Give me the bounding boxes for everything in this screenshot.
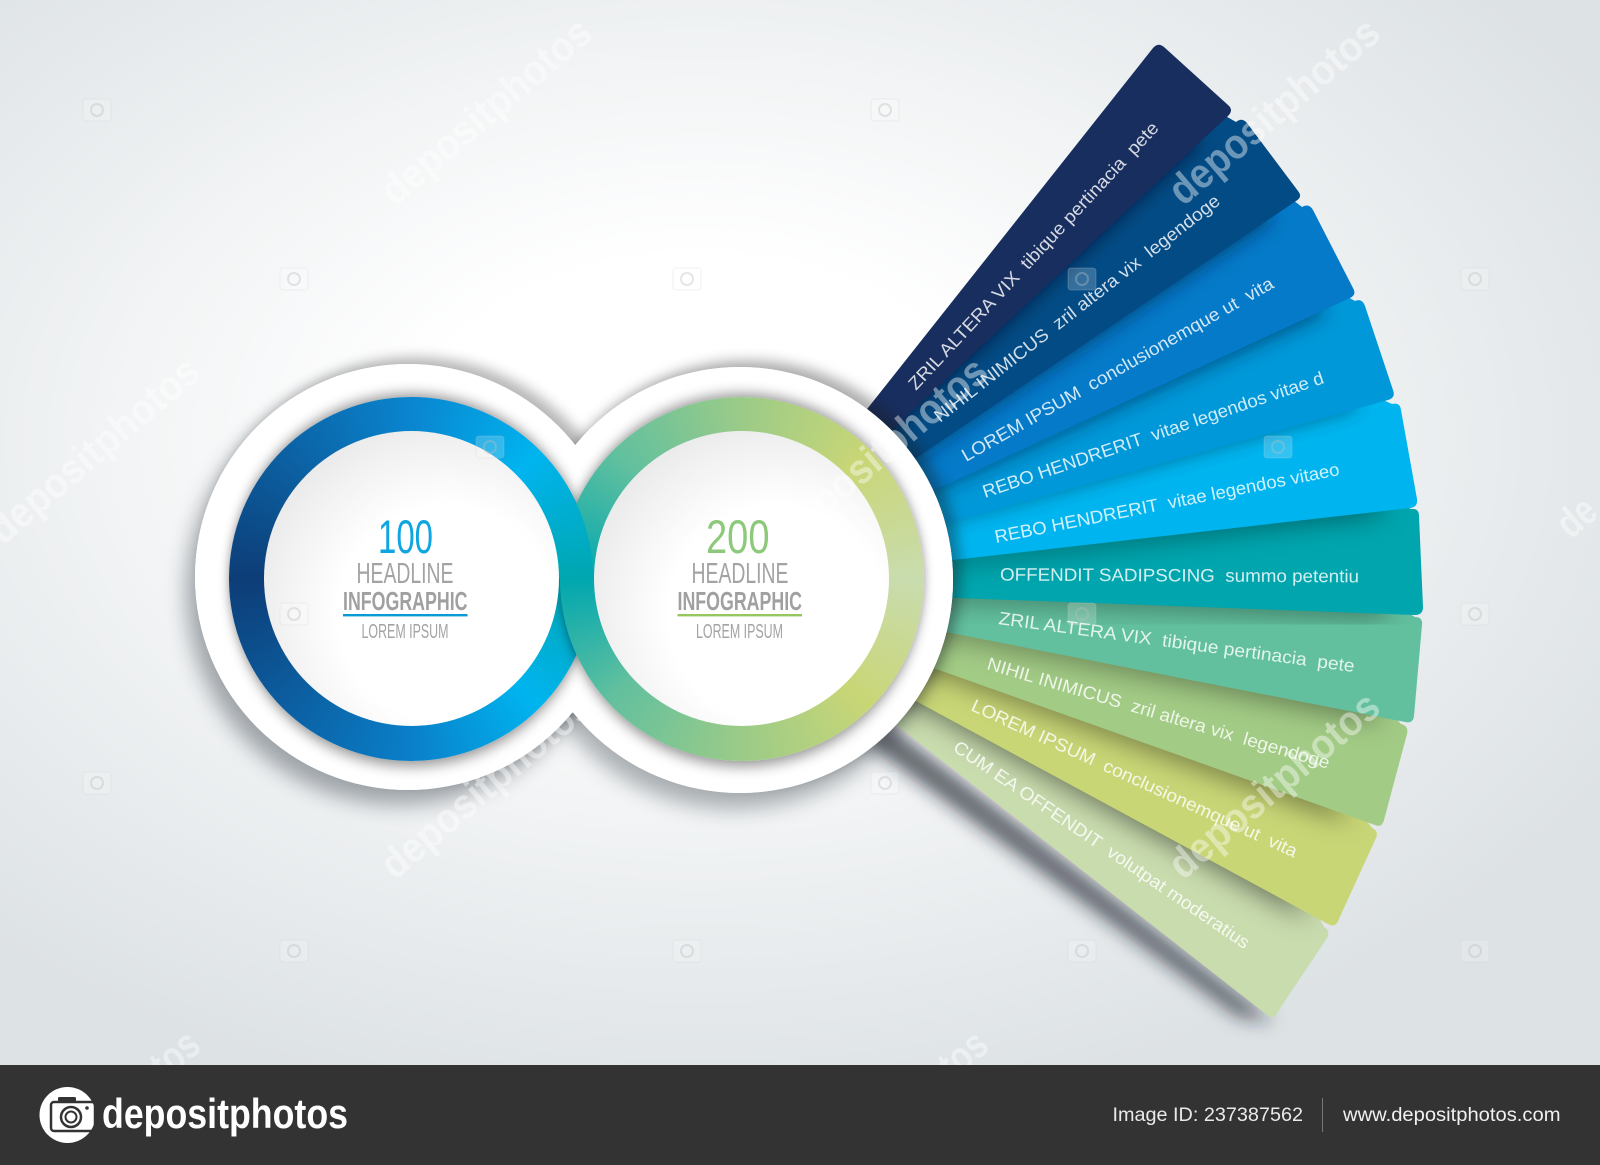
left circle text: 100 (378, 510, 433, 563)
band 4 (933, 298, 1394, 520)
depositphotos watermarks: tos (140, 1020, 209, 1088)
shadow under lowest band (868, 722, 1273, 1022)
band 2 (892, 116, 1300, 458)
band 2: NIHIL INIMICUS zril altera vix legendoge (930, 191, 1224, 426)
right circle text: LOREM IPSUM (696, 621, 783, 643)
band 3: LOREM IPSUM conclusionemque ut vita (958, 273, 1278, 465)
band 5: REBO HENDRERIT vitae legendos vitaeo (993, 459, 1341, 547)
left blue ring (229, 396, 593, 760)
right inner disc (594, 431, 889, 726)
shadow of left white disc (195, 364, 621, 790)
image id: Image ID: 237387562 (1112, 1104, 1303, 1126)
band 7: ZRIL ALTERA VIX tibique pertinacia pete (997, 608, 1356, 676)
website: www.depositphotos.com (1342, 1104, 1560, 1126)
depositphotos watermarks: depositphotos (371, 682, 601, 888)
left inner disc (264, 431, 559, 726)
right circle text (678, 510, 802, 643)
left circle text: INFOGRAPHIC (343, 588, 468, 616)
fan of ten coloured bands (864, 44, 1423, 1032)
band 8 (934, 632, 1408, 826)
band 6 (952, 508, 1423, 615)
infinity pair of circles (174, 350, 968, 820)
band 1: ZRIL ALTERA VIX tibique pertinacia pete (904, 118, 1163, 394)
band 3 (915, 202, 1354, 490)
band 10: CUM EA OFFENDIT volutpat moderatius (950, 737, 1253, 953)
band 1 (742, 45, 1231, 570)
band 6: OFFENDIT SADIPSCING summo petentiu (1000, 565, 1359, 586)
band 9 (916, 668, 1377, 926)
shadow of right white disc (527, 367, 953, 793)
icon: camera logo (40, 1087, 96, 1143)
depositphotos watermarks: depositphotos (1159, 682, 1389, 888)
right circle text: INFOGRAPHIC (678, 588, 802, 616)
right circle text: HEADLINE (692, 558, 788, 590)
left white disc (195, 364, 621, 790)
band 4: REBO HENDRERIT vitae legendos vitae d (980, 368, 1326, 502)
band 10 (896, 701, 1328, 1017)
band 5 (945, 400, 1418, 560)
band 9: LOREM IPSUM conclusionemque ut vita (968, 695, 1302, 862)
depositphotos watermarks: tos (928, 1020, 997, 1088)
left circle text: LOREM IPSUM (362, 621, 448, 643)
left ring upper half woven over right ring (412, 397, 592, 578)
right circle text: 200 (706, 510, 770, 563)
right green ring (560, 396, 924, 760)
watermark camera icons (83, 99, 1489, 962)
left circle text: HEADLINE (356, 558, 454, 590)
band 8: NIHIL INIMICUS zril altera vix legendoge (985, 654, 1332, 773)
right white disc (527, 367, 953, 793)
logo wordmark: depositphotos (102, 1090, 348, 1137)
depositphotos watermarks: depositphotos (767, 347, 997, 553)
band 7 (946, 598, 1422, 722)
left circle text (343, 510, 468, 643)
footer bar (0, 1065, 1600, 1165)
